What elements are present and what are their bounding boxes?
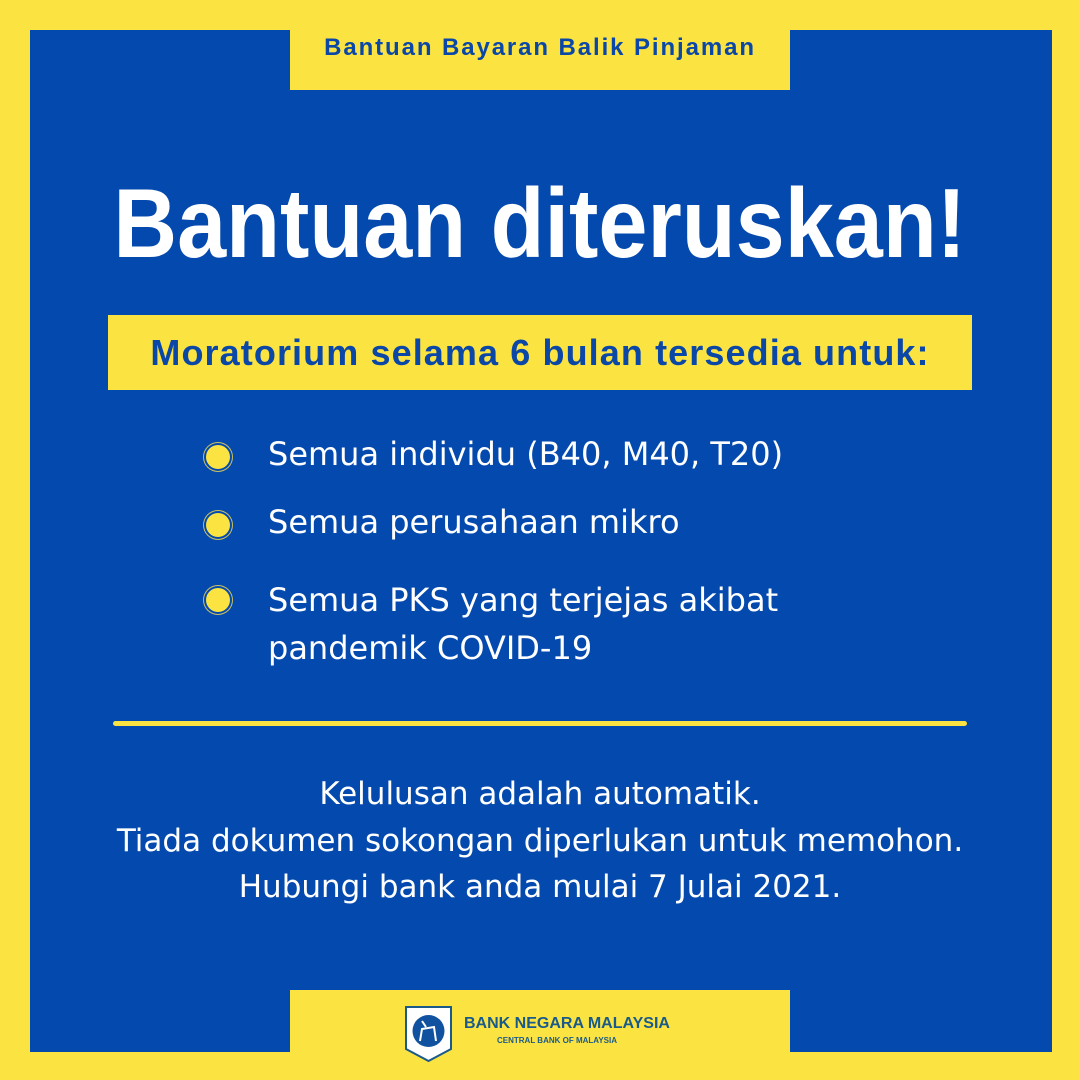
- footer text: [116, 776, 963, 905]
- bullet 3: Semua PKS yang terjejas akibat: [268, 581, 778, 619]
- bottom tab with logo: CENTRAL BANK OF MALAYSIA: [497, 1036, 617, 1045]
- bullet list: [203, 435, 783, 667]
- bottom tab with logo: [290, 990, 790, 1054]
- title: Bantuan diteruskan!: [114, 168, 966, 278]
- subtitle bar: [108, 315, 972, 390]
- icon: BNM crest: [405, 1006, 452, 1062]
- logo text: BANK NEGARA MALAYSIA: [464, 1015, 670, 1032]
- top tab: Bantuan Bayaran Balik Pinjaman: [324, 34, 756, 61]
- bullet 1: Semua individu (B40, M40, T20): [268, 435, 783, 473]
- bullet 3: pandemik COVID-19: [268, 629, 592, 667]
- divider: [113, 721, 967, 726]
- footer text: Tiada dokumen sokongan diperlukan untuk memohon.: [117, 822, 963, 858]
- footer text: Kelulusan adalah automatik.: [319, 776, 761, 812]
- subtitle bar: Moratorium selama 6 bulan tersedia untuk:: [150, 332, 930, 373]
- bullet 2: Semua perusahaan mikro: [268, 503, 680, 541]
- bullet 3: [203, 581, 778, 667]
- top tab: [290, 28, 790, 90]
- footer text: Hubungi bank anda mulai 7 Julai 2021.: [239, 869, 841, 905]
